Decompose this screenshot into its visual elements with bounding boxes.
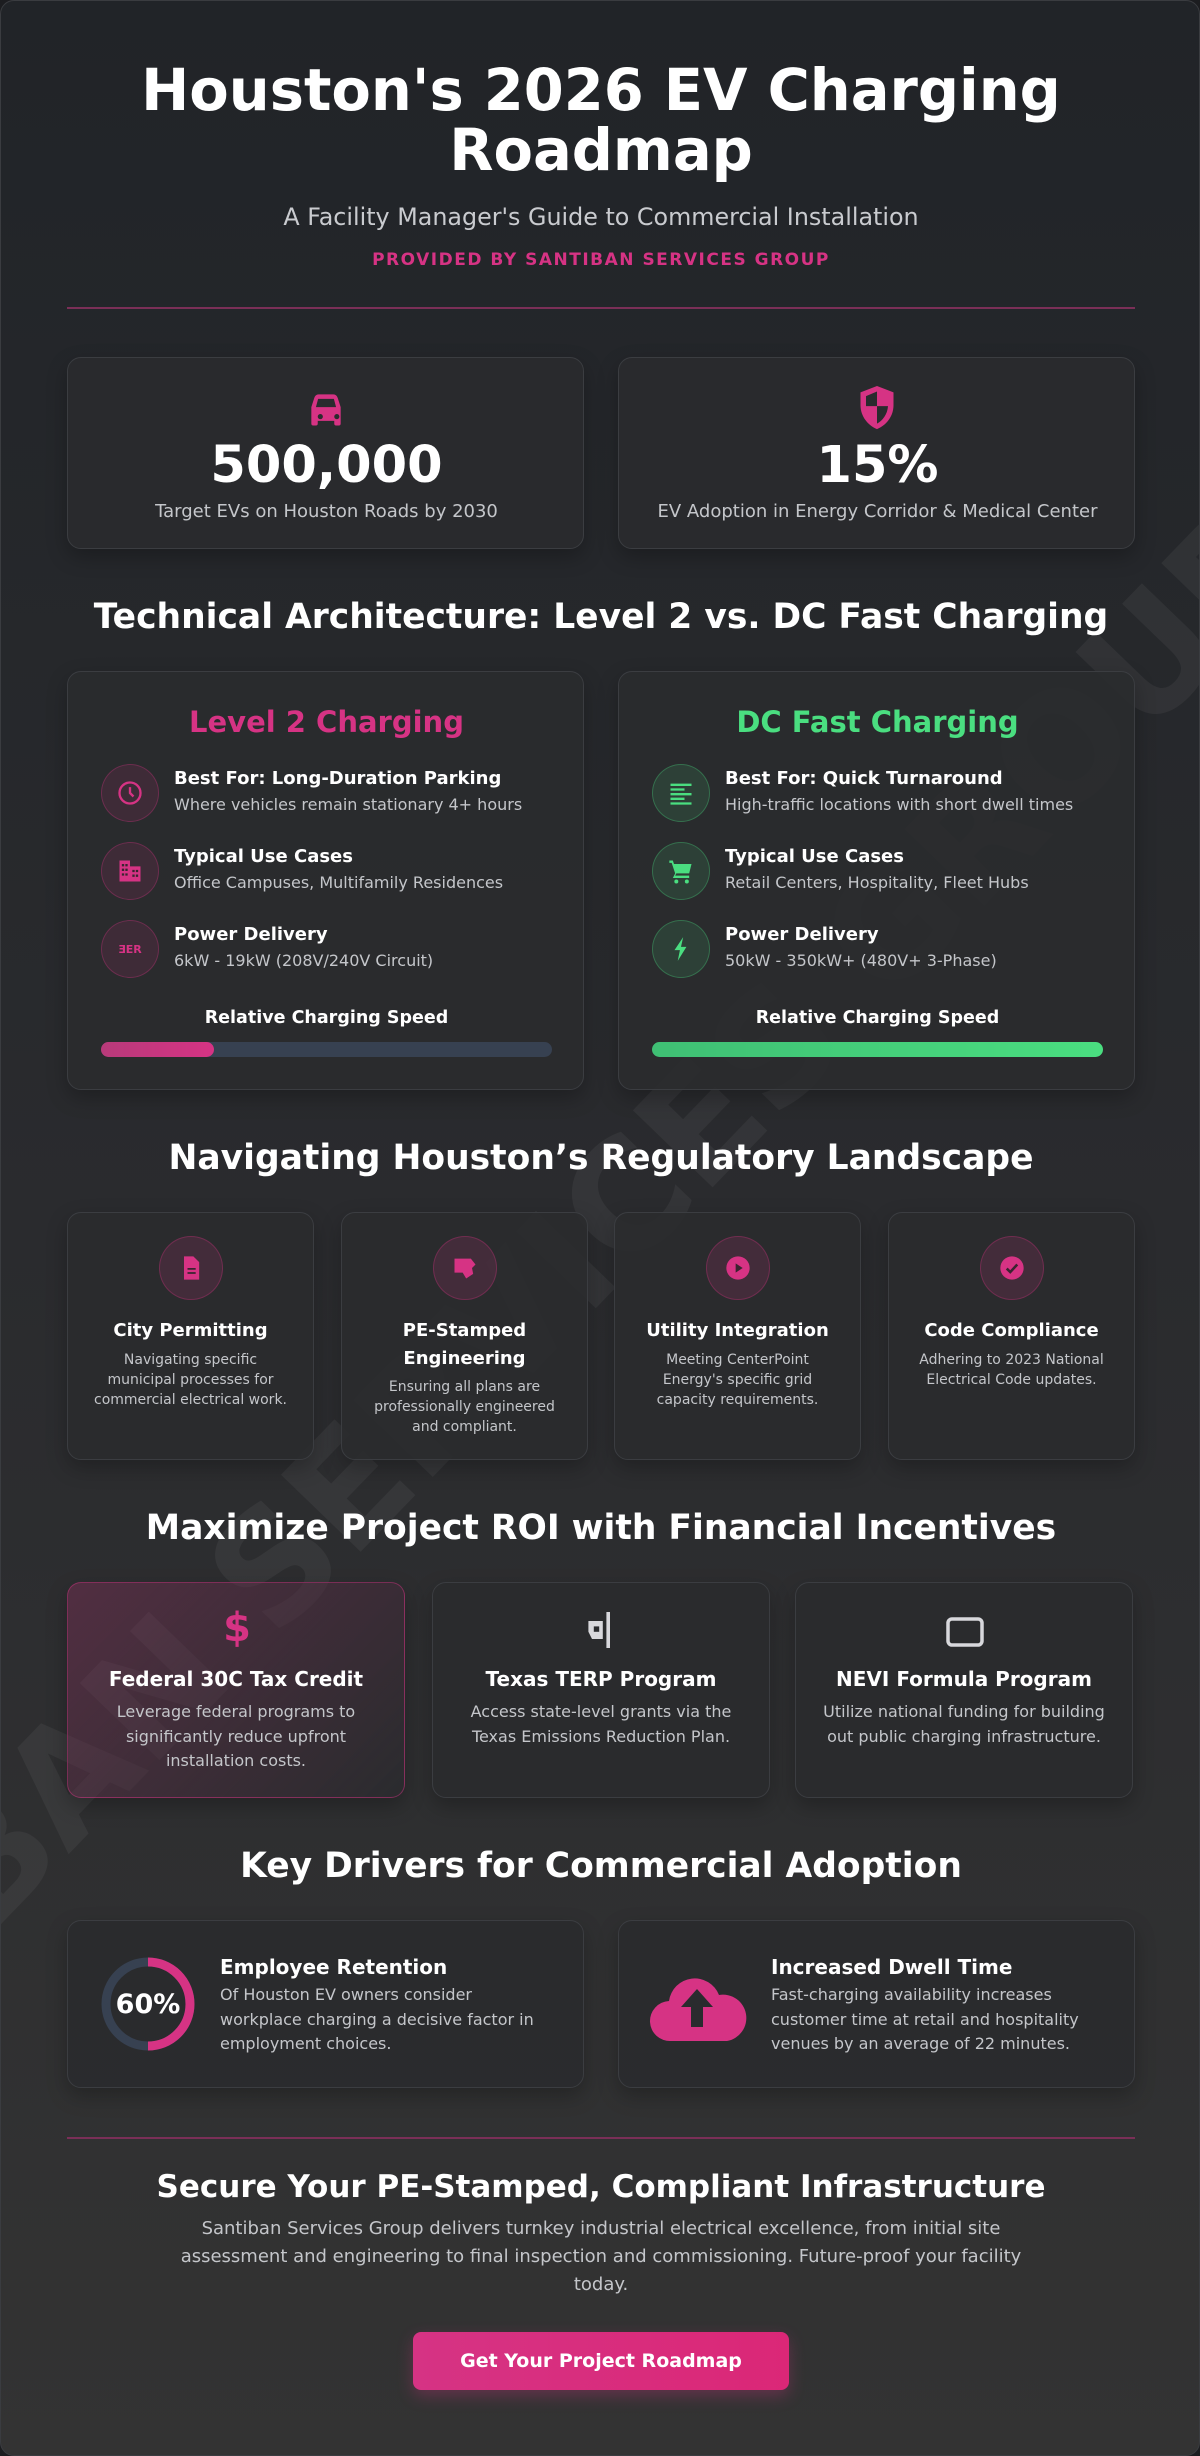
label: relative speed: Relative Charging Speed bbox=[205, 1008, 448, 1028]
heading: technical architecture: Technical Architecture: Level 2 vs. DC Fast Charging bbox=[94, 597, 1108, 637]
card: code compliance: Adhering to 2023 National Electrical Code updates. bbox=[919, 1352, 1104, 1388]
row: power: ƎER bbox=[118, 942, 142, 956]
cta text: Santiban Services Group delivers turnkey industrial electrical excellence, from initial site assessment and engineering to final inspection and commissioning. Future-proof your facility today. bbox=[181, 2218, 1021, 2295]
card: employee retention bbox=[67, 1920, 584, 2088]
card: federal 30c: $ bbox=[223, 1605, 251, 1651]
title: Roadmap bbox=[449, 117, 753, 184]
card: city permitting bbox=[67, 1212, 314, 1460]
driver text bbox=[220, 1955, 534, 2053]
driver text: Employee Retention bbox=[220, 1955, 447, 1979]
provider tag: PROVIDED BY SANTIBAN SERVICES GROUP bbox=[372, 250, 830, 270]
card: terp: Texas TERP Program bbox=[486, 1667, 716, 1691]
stat card: 15% bbox=[618, 357, 1135, 549]
card title: Level 2 Charging bbox=[189, 705, 464, 739]
row: power: 50kW - 350kW+ (480V+ 3-Phase) bbox=[725, 951, 997, 970]
row: power: Power Delivery bbox=[174, 924, 328, 945]
row: use cases: Typical Use Cases bbox=[174, 846, 353, 867]
panel: level 2 bbox=[67, 671, 584, 1090]
card: code compliance bbox=[888, 1212, 1135, 1460]
panel: dc fast bbox=[618, 671, 1135, 1090]
title: Houston's 2026 EV Charging bbox=[141, 57, 1061, 124]
card: federal 30c: Leverage federal programs to significantly reduce upfront installation costs. bbox=[117, 1702, 355, 1770]
stat number: 15% bbox=[816, 436, 939, 495]
row: best for: Where vehicles remain stationary 4+ hours bbox=[174, 795, 522, 814]
card: pe-stamped: PE-Stamped bbox=[403, 1320, 526, 1341]
stat label: Target EVs on Houston Roads by 2030 bbox=[155, 501, 498, 522]
card: utility bbox=[614, 1212, 861, 1460]
card: city permitting: Navigating specific municipal processes for commercial electrical work. bbox=[94, 1352, 287, 1408]
driver text: Of Houston EV owners consider workplace charging a decisive factor in employment choices. bbox=[220, 1985, 534, 2053]
driver text bbox=[771, 1955, 1079, 2053]
row: use cases bbox=[101, 842, 503, 900]
row: power bbox=[652, 920, 997, 978]
heading: key drivers: Key Drivers for Commercial Adoption bbox=[240, 1846, 962, 1886]
card: nevi bbox=[795, 1582, 1133, 1798]
label: relative speed: Relative Charging Speed bbox=[756, 1008, 999, 1028]
driver text: Fast-charging availability increases customer time at retail and hospitality venues by an average of 22 minutes. bbox=[771, 1985, 1079, 2053]
title bbox=[141, 57, 1061, 184]
subtitle: A Facility Manager's Guide to Commercial Installation bbox=[283, 203, 919, 231]
panel: regulatory cards bbox=[67, 1212, 1135, 1466]
row: best for: Best For: Quick Turnaround bbox=[725, 768, 1003, 789]
card: nevi: Utilize national funding for building out public charging infrastructure. bbox=[823, 1702, 1105, 1746]
card: code compliance: Code Compliance bbox=[924, 1320, 1099, 1341]
cta button: Get Your Project Roadmap bbox=[460, 2350, 742, 2372]
row: use cases: Typical Use Cases bbox=[725, 846, 904, 867]
card: terp: Access state-level grants via the Texas Emissions Reduction Plan. bbox=[471, 1702, 731, 1746]
card: federal 30c bbox=[67, 1582, 405, 1798]
heading: incentives: Maximize Project ROI with Financial Incentives bbox=[146, 1508, 1056, 1548]
stat label: EV Adoption in Energy Corridor & Medical Center bbox=[658, 501, 1098, 522]
card: pe-stamped: Ensuring all plans are professionally engineered and compliant. bbox=[374, 1379, 555, 1435]
donut chart: 60%: 60% bbox=[116, 1989, 180, 2020]
panel: incentives bbox=[67, 1582, 1133, 1804]
cta button bbox=[413, 2332, 789, 2390]
card: terp bbox=[432, 1582, 770, 1798]
row: use cases: Retail Centers, Hospitality, Fleet Hubs bbox=[725, 873, 1029, 892]
row: best for: High-traffic locations with short dwell times bbox=[725, 795, 1073, 814]
card: city permitting: City Permitting bbox=[113, 1320, 268, 1341]
row: best for: Best For: Long-Duration Parking bbox=[174, 768, 501, 789]
card: utility: Utility Integration bbox=[646, 1320, 829, 1341]
row: power: 6kW - 19kW (208V/240V Circuit) bbox=[174, 951, 433, 970]
icon: shield bbox=[860, 386, 894, 430]
row: power: Power Delivery bbox=[725, 924, 879, 945]
card: utility: Meeting CenterPoint Energy's specific grid capacity requirements. bbox=[657, 1352, 818, 1408]
driver text: Increased Dwell Time bbox=[771, 1955, 1012, 1979]
heading: regulatory: Navigating Houston’s Regulatory Landscape bbox=[168, 1138, 1034, 1178]
icon: cloud upload bbox=[650, 1978, 746, 2041]
bar: dc speed bbox=[652, 1042, 1103, 1057]
card: pe-stamped bbox=[341, 1212, 588, 1460]
row: power bbox=[101, 920, 433, 978]
row: use cases: Office Campuses, Multifamily Residences bbox=[174, 873, 503, 892]
row: use cases bbox=[652, 842, 1029, 900]
row: best for bbox=[652, 764, 1073, 822]
card: nevi: NEVI Formula Program bbox=[836, 1667, 1092, 1691]
stat card: 500,000 bbox=[67, 357, 584, 549]
cta heading: Secure Your PE-Stamped, Compliant Infrastructure bbox=[157, 2169, 1045, 2205]
row: best for bbox=[101, 764, 522, 822]
card: pe-stamped: Engineering bbox=[403, 1348, 526, 1369]
bar: level 2 speed bbox=[101, 1042, 552, 1057]
card title: DC Fast Charging bbox=[736, 705, 1019, 739]
donut chart: 60% bbox=[102, 1958, 194, 2050]
card: dwell time bbox=[618, 1920, 1135, 2088]
stat number: 500,000 bbox=[210, 436, 443, 495]
icon: car bbox=[311, 394, 341, 426]
card: federal 30c: Federal 30C Tax Credit bbox=[109, 1667, 363, 1691]
